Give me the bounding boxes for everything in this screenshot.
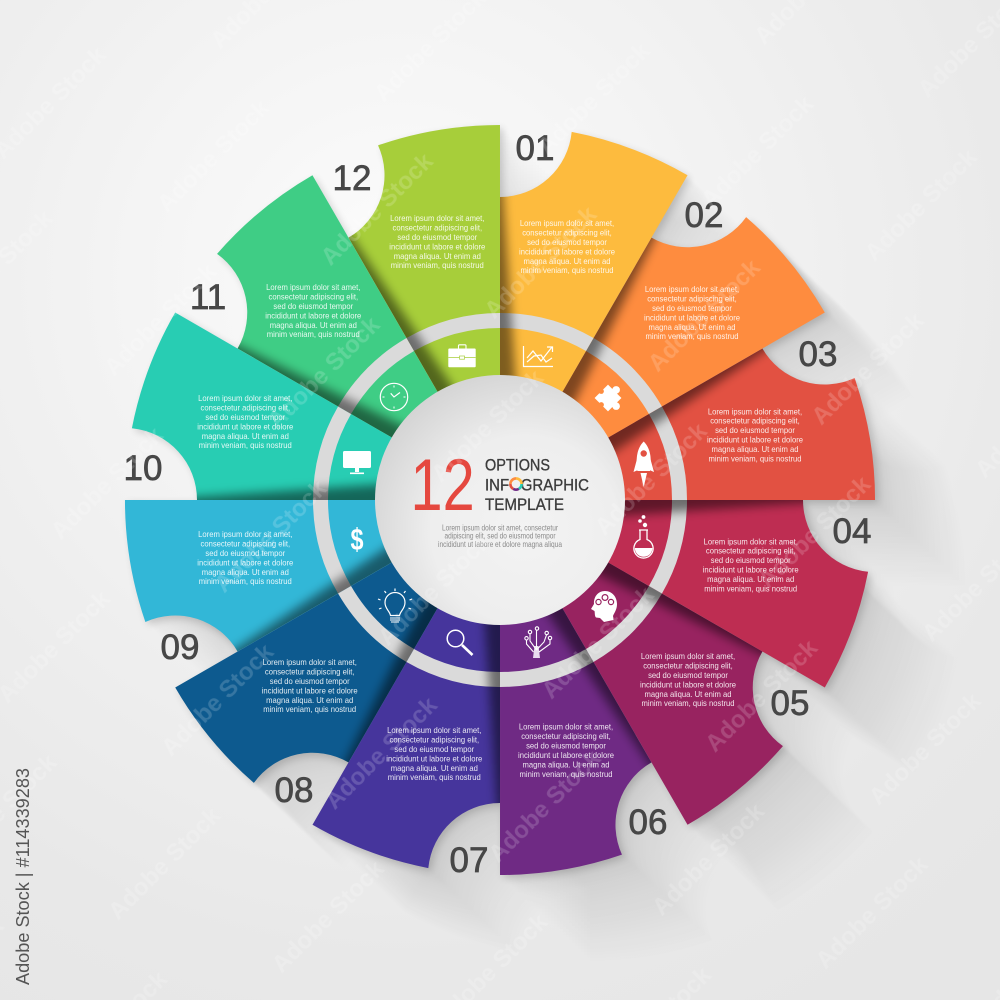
text block 03: sed do eiusmod tempor <box>715 426 795 435</box>
panel: segment 05 <box>562 562 808 825</box>
text block 06: incididunt ut labore et dolore <box>518 751 614 760</box>
text block 10 <box>197 394 294 450</box>
text block 07: minim veniam, quis nostrud <box>388 773 481 782</box>
icon: flask <box>634 515 653 558</box>
text block 09: sed do eiusmod tempor <box>205 549 285 558</box>
wedge 02 <box>562 217 825 438</box>
text block 02: consectetur adipiscing elit, <box>647 294 737 304</box>
center description text: incididunt ut labore et dolore magna aliqua <box>438 540 562 549</box>
panel: segment 11 <box>192 175 438 438</box>
text block 05: minim veniam, quis nostrud <box>642 699 734 708</box>
text block 04 <box>703 537 799 594</box>
text block 08: Lorem ipsum dolor sit amet, <box>263 658 357 667</box>
icon: head with gears <box>591 591 617 622</box>
text block 05 <box>640 652 736 708</box>
wedge 06 <box>500 608 652 875</box>
wedge 08 <box>175 562 438 783</box>
stock id vertical label: Adobe Stock | #114339283 <box>13 768 33 985</box>
wedge 07 <box>312 608 500 868</box>
text block 06: Lorem ipsum dolor sit amet, <box>519 722 613 732</box>
text block 10: magna aliqua. Ut enim ad <box>202 431 289 441</box>
text block 01 <box>519 219 615 275</box>
text block 03: incididunt ut labore et dolore <box>707 435 803 445</box>
panel: segment 07 <box>312 608 500 873</box>
text block 03: minim veniam, quis nostrud <box>709 454 801 464</box>
panel: segment 10 <box>126 312 392 500</box>
text block 10: minim veniam, quis nostrud <box>199 441 292 450</box>
text block 11: incididunt ut labore et dolore <box>265 311 362 320</box>
text block 03 <box>707 407 803 464</box>
big number 12: 12 <box>410 443 475 526</box>
text block 12: magna aliqua. Ut enim ad <box>394 251 481 261</box>
number 07: 07 <box>450 841 488 880</box>
text block 04: Lorem ipsum dolor sit amet, <box>704 537 798 546</box>
panel: segment 04 <box>608 500 871 688</box>
text block 07: magna aliqua. Ut enim ad <box>391 763 478 773</box>
text block 03: Lorem ipsum dolor sit amet, <box>708 407 802 416</box>
panel: segment 02 <box>562 202 825 438</box>
text block 10: sed do eiusmod tempor <box>205 413 285 422</box>
text block 08: sed do eiusmod tempor <box>270 677 350 686</box>
text block 06 <box>518 722 614 779</box>
text block 10: Lorem ipsum dolor sit amet, <box>198 394 292 403</box>
text block 09: consectetur adipiscing elit, <box>201 539 290 549</box>
text block 06: magna aliqua. Ut enim ad <box>522 760 610 770</box>
text block 12: sed do eiusmod tempor <box>397 233 477 242</box>
text block 02: Lorem ipsum dolor sit amet, <box>645 285 739 294</box>
heading: options infographic template: INFOGRAPHIC <box>485 475 589 494</box>
text block 01: magna aliqua. Ut enim ad <box>523 256 611 266</box>
panel: segment 09 <box>124 500 392 660</box>
text block 09: incididunt ut labore et dolore <box>197 558 294 567</box>
text block 04: consectetur adipiscing elit, <box>706 546 795 556</box>
number 03: 03 <box>799 335 837 374</box>
text block 11 <box>265 283 362 339</box>
wedge 04 <box>608 500 868 688</box>
number 04: 04 <box>833 512 871 551</box>
icon: dollar sign: $ <box>350 522 364 556</box>
text block 07 <box>386 726 483 782</box>
text block 03: consectetur adipiscing elit, <box>710 416 800 426</box>
text block 08: incididunt ut labore et dolore <box>262 686 358 695</box>
text block 02: minim veniam, quis nostrud <box>646 332 738 341</box>
number 01: 01 <box>516 129 554 168</box>
center description text: adipiscing elit, sed do eiusmod tempor <box>444 532 556 541</box>
text block 10: incididunt ut labore et dolore <box>197 422 294 431</box>
text block 05: consectetur adipiscing elit, <box>643 661 733 671</box>
text block 06: sed do eiusmod tempor <box>526 741 606 751</box>
text block 11: sed do eiusmod tempor <box>273 302 353 311</box>
text block 05: incididunt ut labore et dolore <box>640 680 736 689</box>
text block 08 <box>262 658 358 714</box>
text block 05: sed do eiusmod tempor <box>648 671 728 680</box>
heading: options infographic template: OPTIONS <box>485 456 550 475</box>
text block 12: Lorem ipsum dolor sit amet, <box>390 214 484 223</box>
text block 11: consectetur adipiscing elit, <box>269 292 358 302</box>
center description text <box>438 523 562 549</box>
text block 05: magna aliqua. Ut enim ad <box>644 689 732 699</box>
number 02: 02 <box>685 196 723 235</box>
wedge 11 <box>217 175 438 438</box>
text block 12: minim veniam, quis nostrud <box>391 261 484 270</box>
icon: monitor <box>343 451 371 474</box>
text block 01: consectetur adipiscing elit, <box>522 228 612 238</box>
text block 09: Lorem ipsum dolor sit amet, <box>198 530 292 539</box>
number 05: 05 <box>771 684 809 723</box>
wedge 09 <box>124 500 392 652</box>
text block 04: incididunt ut labore et dolore <box>703 565 799 575</box>
text block 12 <box>389 214 486 270</box>
text block 01: sed do eiusmod tempor <box>527 238 607 247</box>
text block 08: minim veniam, quis nostrud <box>263 705 356 714</box>
text block 12: incididunt ut labore et dolore <box>389 242 486 251</box>
panel: segment 08 <box>175 562 438 803</box>
text block 10: consectetur adipiscing elit, <box>201 403 290 413</box>
icon: briefcase <box>448 345 476 367</box>
text block 09: minim veniam, quis nostrud <box>199 577 292 586</box>
soft contact shadow around the wheel <box>90 90 916 916</box>
panel: segment 03 <box>608 340 875 500</box>
text block 01: incididunt ut labore et dolore <box>519 247 615 256</box>
panel: segment 12 <box>334 125 500 392</box>
text block 01: minim veniam, quis nostrud <box>521 266 613 275</box>
text block 04: magna aliqua. Ut enim ad <box>707 575 794 584</box>
text block 09 <box>197 530 294 586</box>
icon: circuit tree <box>525 627 552 658</box>
number 09: 09 <box>161 628 199 667</box>
text block 04: minim veniam, quis nostrud <box>704 584 797 594</box>
text block 06: consectetur adipiscing elit, <box>521 732 611 741</box>
heading: options infographic template: TEMPLATE <box>485 495 564 514</box>
text block 08: consectetur adipiscing elit, <box>265 667 354 677</box>
text block 02: magna aliqua. Ut enim ad <box>648 322 736 332</box>
icon: light bulb <box>378 588 412 622</box>
icon: magnifier <box>447 630 472 655</box>
panel: segment 06 <box>500 608 666 875</box>
text block 02 <box>644 285 740 341</box>
text block 11: Lorem ipsum dolor sit amet, <box>266 283 360 292</box>
text block 07: consectetur adipiscing elit, <box>390 735 479 745</box>
text block 07: sed do eiusmod tempor <box>394 745 474 754</box>
text block 07: incididunt ut labore et dolore <box>386 754 483 763</box>
wedge 10 <box>132 312 392 500</box>
wedge 05 <box>562 562 783 825</box>
number 10: 10 <box>124 449 162 488</box>
text block 03: magna aliqua. Ut enim ad <box>711 445 799 454</box>
text block 04: sed do eiusmod tempor <box>711 556 791 565</box>
number 11: 11 <box>190 278 226 317</box>
text block 11: minim veniam, quis nostrud <box>267 330 360 339</box>
panel: segment 01 <box>500 132 688 392</box>
number 12: 12 <box>333 159 371 198</box>
text block 07: Lorem ipsum dolor sit amet, <box>387 726 481 735</box>
text block 11: magna aliqua. Ut enim ad <box>270 320 357 330</box>
icon: line chart <box>524 346 553 366</box>
text block 06: minim veniam, quis nostrud <box>520 770 612 779</box>
icon: rocket <box>634 442 654 487</box>
text block 09: magna aliqua. Ut enim ad <box>202 567 289 577</box>
wedge 01 <box>500 132 688 392</box>
wedge 12 <box>348 125 500 392</box>
wedge 03 <box>608 348 875 500</box>
icon: clock <box>380 383 408 411</box>
center description text: Lorem ipsum dolor sit amet, consectetur <box>442 523 558 532</box>
text block 02: incididunt ut labore et dolore <box>644 313 740 322</box>
text block 12: consectetur adipiscing elit, <box>393 223 482 233</box>
text block 02: sed do eiusmod tempor <box>652 304 732 313</box>
center hub circle <box>375 375 625 625</box>
heading: options infographic template <box>485 456 589 514</box>
text block 08: magna aliqua. Ut enim ad <box>266 695 353 705</box>
number 06: 06 <box>629 803 667 842</box>
text block 05: Lorem ipsum dolor sit amet, <box>641 652 735 661</box>
number 08: 08 <box>275 771 313 810</box>
text block 01: Lorem ipsum dolor sit amet, <box>520 219 614 228</box>
icon: coloured ring letter <box>510 478 522 490</box>
icon: puzzle piece <box>591 379 630 417</box>
